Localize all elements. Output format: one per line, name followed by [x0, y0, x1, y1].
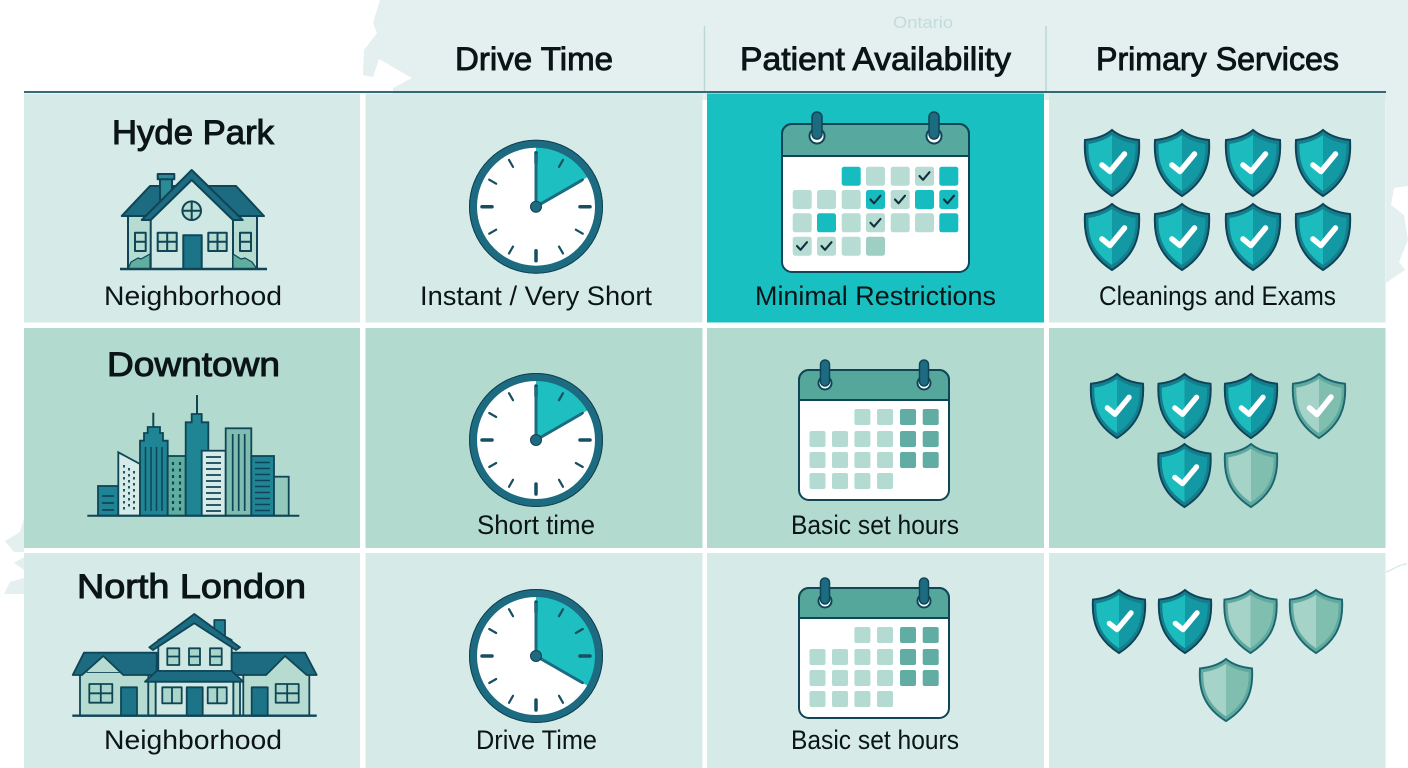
heading: Hyde Park: Hyde Park [112, 114, 275, 152]
panel: Downtown patient availability [707, 328, 1044, 548]
panel: Downtown location [24, 328, 360, 548]
label: Neighborhood: Neighborhood [104, 725, 282, 755]
row: Hyde Park [24, 94, 1386, 322]
label: Basic set hours: Basic set hours [791, 510, 959, 540]
panel: Hyde Park location [24, 94, 360, 322]
icons: six shields, four checked [1091, 374, 1345, 507]
panel: Downtown drive time [366, 328, 702, 548]
label: Minimal Restrictions: Minimal Restrictions [755, 281, 996, 311]
column heading: Drive Time: Drive Time [455, 41, 613, 77]
panel: North London drive time [366, 553, 702, 768]
panel: Downtown primary services [1049, 328, 1386, 548]
background map of Ontario [4, 0, 1408, 594]
heading: Downtown: Downtown [107, 346, 280, 384]
icon: calendar with checkmarks [782, 112, 969, 272]
heading: North London: North London [77, 568, 306, 606]
icon: detached house [120, 170, 267, 269]
icon: clock, one-sixth wedge [470, 374, 602, 506]
icons: eight checked shields [1085, 130, 1350, 270]
icon: calendar [799, 578, 949, 718]
table header [24, 26, 1386, 92]
icon: city skyline [87, 395, 299, 516]
panel: Hyde Park primary services [1049, 94, 1386, 322]
icon: row of houses [72, 614, 317, 716]
map label: Ontario: Ontario [893, 13, 953, 32]
panel: Hyde Park patient availability (highlighted) [707, 94, 1044, 322]
row: North London [24, 553, 1386, 768]
column heading: Patient Availability: Patient Availability [740, 41, 1012, 77]
icon: clock, one-sixth wedge [470, 140, 602, 273]
icon: calendar [799, 360, 949, 500]
panel: North London location [24, 553, 360, 768]
column heading: Primary Services: Primary Services [1096, 41, 1339, 77]
label: Basic set hours: Basic set hours [791, 725, 959, 755]
panel: North London primary services [1049, 553, 1386, 768]
panel: Hyde Park drive time [366, 94, 702, 322]
label: Cleanings and Exams: Cleanings and Exams [1099, 281, 1336, 311]
label: Short time: Short time [477, 510, 595, 540]
panel: North London patient availability [707, 553, 1044, 768]
label: Neighborhood: Neighborhood [104, 281, 282, 311]
label: Instant / Very Short: Instant / Very Short [420, 281, 652, 311]
row: Downtown [24, 328, 1386, 548]
icon: clock, one-third wedge [470, 590, 602, 722]
label: Drive Time: Drive Time [476, 725, 597, 755]
icons: five shields, two checked [1093, 590, 1342, 721]
